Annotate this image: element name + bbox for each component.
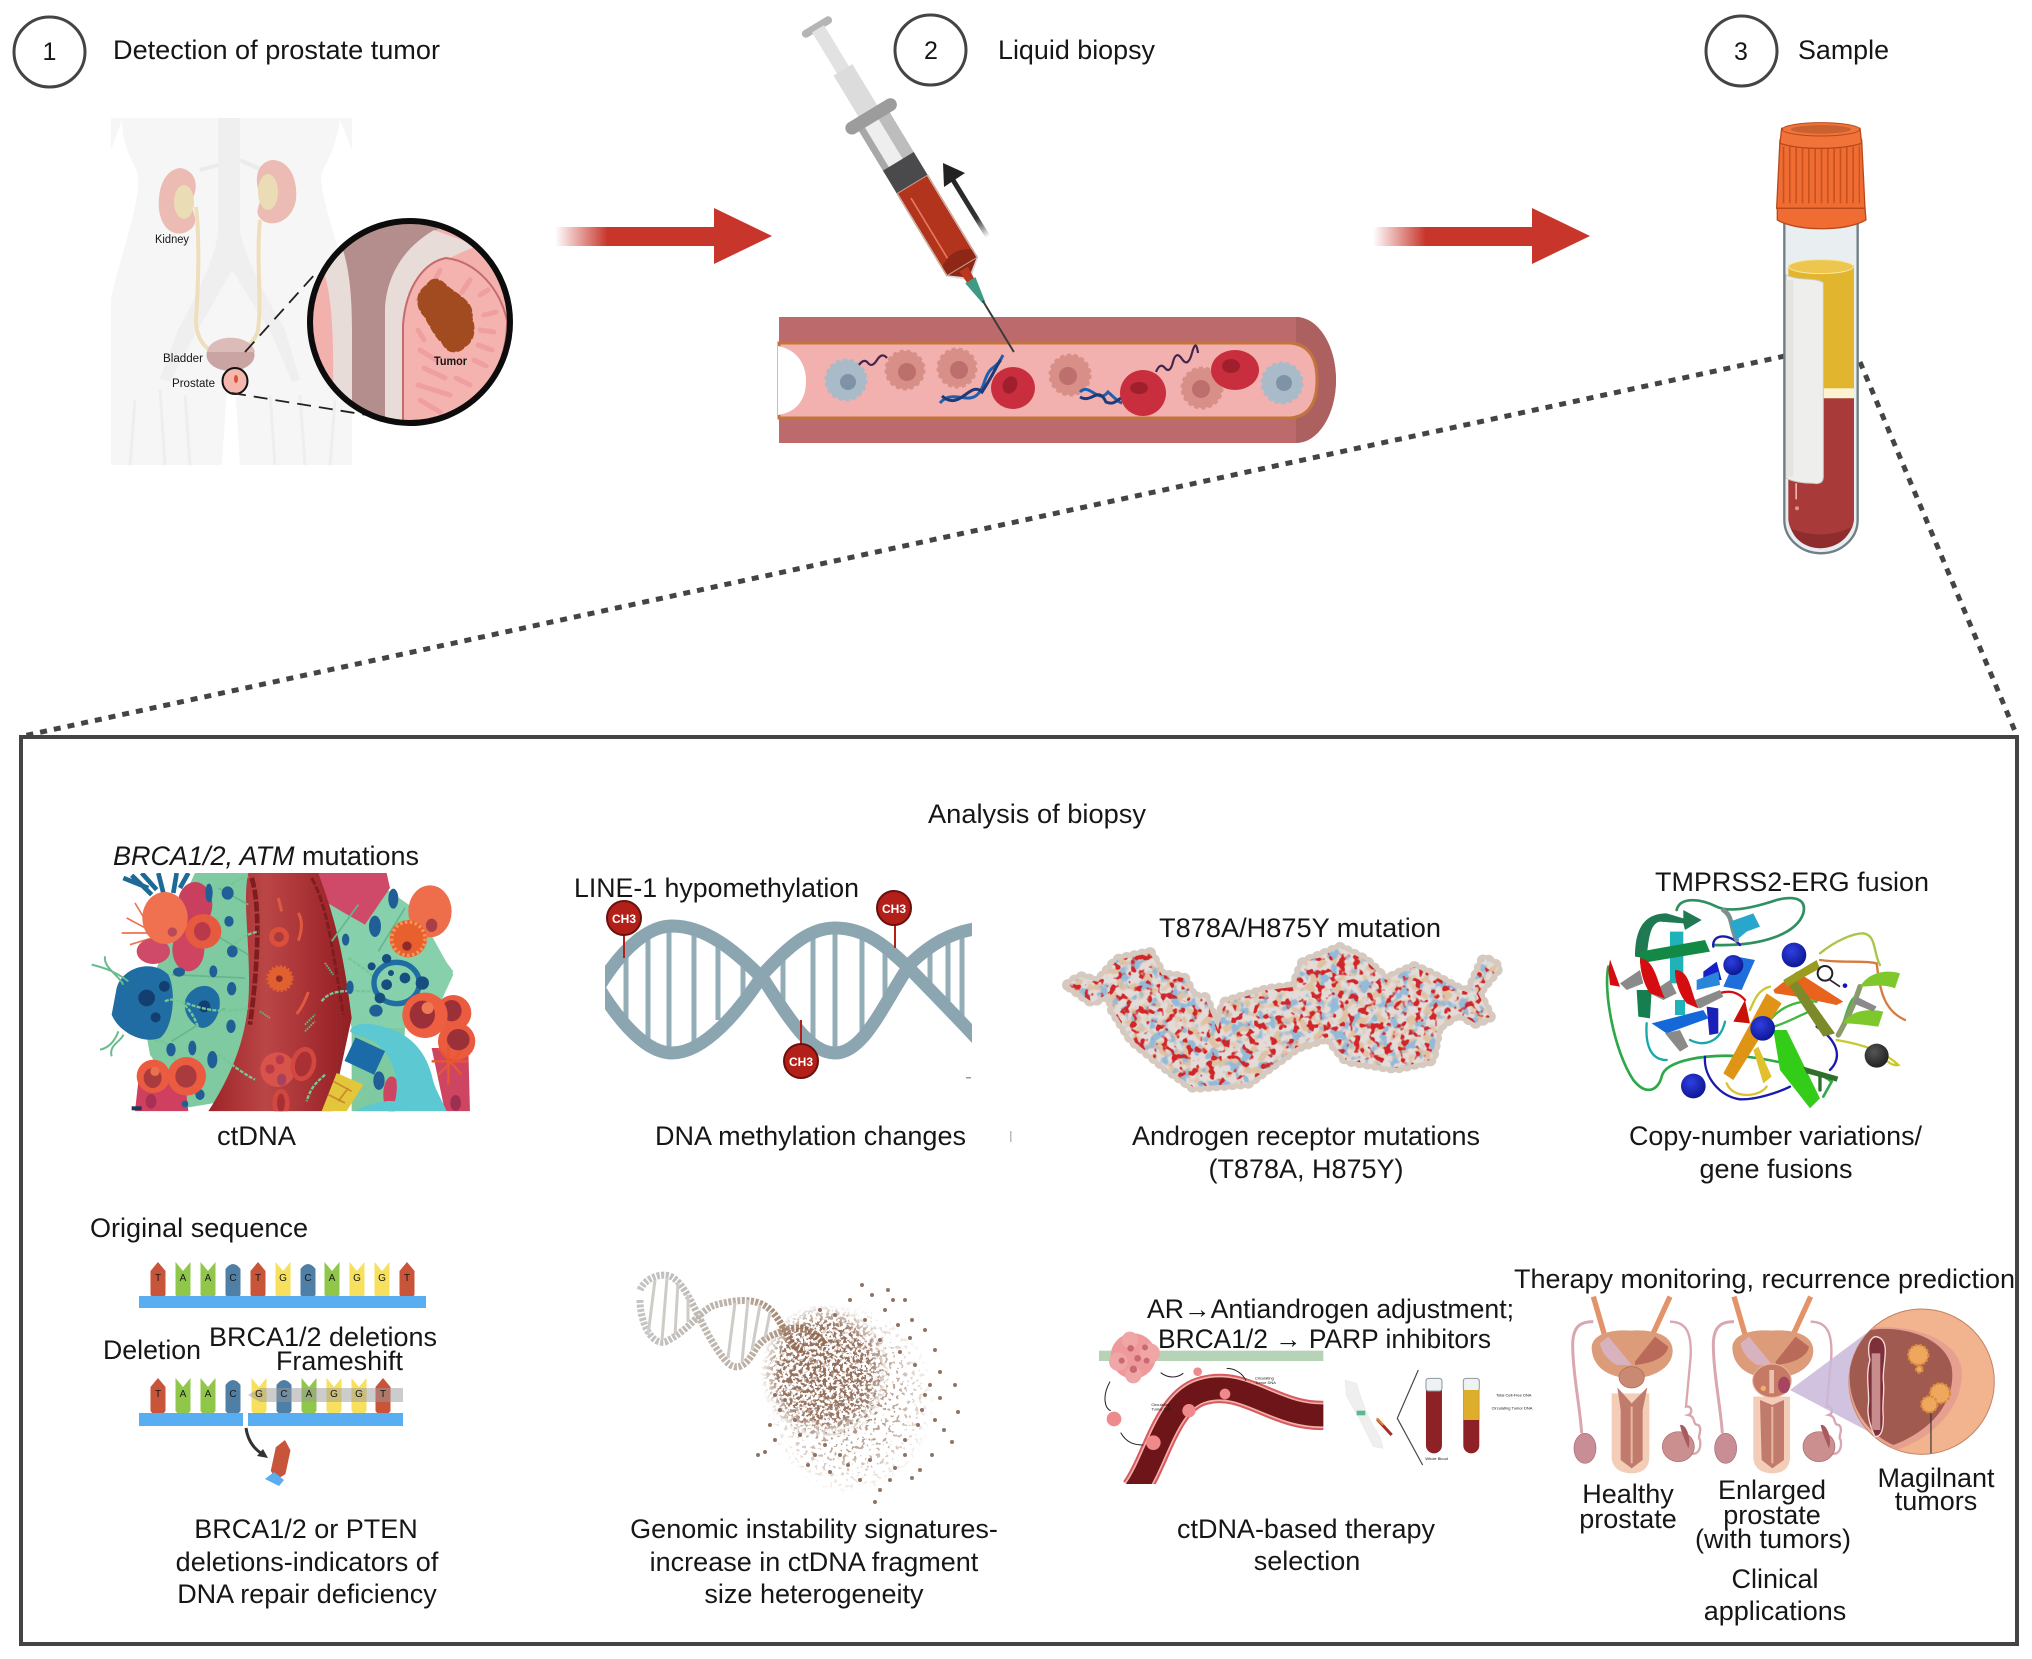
enlarged prostate label: Enlarged xyxy=(1718,1475,1826,1505)
copy number caption: gene fusions xyxy=(1699,1154,1853,1184)
separated plasma tube: Total Cell-Free DNA xyxy=(1496,1393,1532,1398)
curved tumour vessel xyxy=(1135,1388,1330,1490)
urinary anatomy illustration xyxy=(111,118,352,465)
ctDNA caption: ctDNA xyxy=(217,1121,296,1151)
step 2 heading: Liquid biopsy xyxy=(998,35,1155,65)
deleted nucleotide sequence: A xyxy=(180,1389,187,1400)
circulating white cell right xyxy=(1262,363,1302,403)
anatomy label: bladder: Bladder xyxy=(163,353,203,365)
tumor cell cluster xyxy=(1109,1332,1160,1383)
whole blood tube xyxy=(1425,1378,1448,1461)
original nucleotide sequence: T xyxy=(255,1273,261,1284)
original nucleotide sequence: T xyxy=(404,1273,410,1284)
DNA methylation caption: DNA methylation changes xyxy=(655,1121,966,1151)
deleted nucleotide sequence: A xyxy=(306,1389,313,1400)
healthy prostate label xyxy=(1579,1479,1677,1534)
separated plasma tube xyxy=(1463,1378,1533,1453)
magnification wedge xyxy=(1790,1332,1875,1435)
syringe drawing blood xyxy=(790,9,1039,367)
red arrow 1 to 2 xyxy=(555,208,772,264)
therapy selection illustration: Circulating xyxy=(1255,1375,1274,1380)
original nucleotide sequence: A xyxy=(329,1273,336,1284)
clinical applications caption: Clinical xyxy=(1731,1564,1819,1594)
patient arm blood draw xyxy=(1345,1380,1392,1448)
original nucleotide sequence: C xyxy=(304,1273,312,1284)
BRCA/PTEN caption xyxy=(176,1514,439,1609)
original nucleotide sequence: C xyxy=(229,1273,237,1284)
clinical applications caption xyxy=(1704,1564,1846,1626)
genomic instability caption xyxy=(630,1514,998,1609)
glove and tube xyxy=(350,1024,447,1111)
deletion label: Deletion xyxy=(103,1335,201,1365)
BRCA1/2 ATM mutation label: BRCA1/2, ATM mutations xyxy=(113,841,419,871)
copy number caption xyxy=(1629,1121,1922,1184)
BRCA/PTEN caption: deletions-indicators of xyxy=(176,1547,439,1577)
red arrow 2 to 3 xyxy=(1373,208,1590,264)
tumor mass xyxy=(420,281,472,350)
blood vessel with circulating cells xyxy=(778,317,1336,443)
protein ribbon structure xyxy=(1607,898,1905,1108)
genomic instability caption: size heterogeneity xyxy=(704,1579,924,1609)
methyl pin 1: CH3 xyxy=(612,912,636,926)
TMPRSS2-ERG label: TMPRSS2-ERG fusion xyxy=(1655,867,1929,897)
deleted nucleotide sequence: A xyxy=(205,1389,212,1400)
deleted nucleotide sequence: C xyxy=(280,1389,288,1400)
magnified malignant prostate xyxy=(1848,1309,1994,1454)
enlarged prostate label xyxy=(1695,1475,1851,1554)
original nucleotide sequence: G xyxy=(378,1273,386,1284)
therapy selection illustration: Tumor DNA xyxy=(1255,1380,1276,1385)
blood collection tube xyxy=(1777,123,1866,553)
LINE-1 hypomethylation label: LINE-1 hypomethylation xyxy=(574,873,859,903)
circulating white cell left xyxy=(826,360,866,400)
upward black arrow xyxy=(943,163,988,237)
frameshift label: Frameshift xyxy=(276,1346,403,1376)
deleted nucleotide sequence: T xyxy=(380,1389,386,1400)
therapy selection illustration: Circulating xyxy=(1151,1402,1170,1407)
analysis panel frame xyxy=(21,737,2017,1644)
DNA fragmenting into particles xyxy=(640,1275,958,1502)
therapy selection illustration: Tumor Cell xyxy=(1151,1407,1171,1412)
enlarged prostate with tumors xyxy=(1713,1297,1841,1473)
methyl pin 1 xyxy=(607,901,641,958)
enlarged prostate label: prostate xyxy=(1723,1500,1821,1530)
dotted connectors from tube to analysis panel xyxy=(23,356,2017,736)
methyl pin 2 xyxy=(877,891,911,948)
androgen receptor caption: (T878A, H875Y) xyxy=(1208,1154,1404,1184)
step 1 number badge xyxy=(14,17,85,87)
metal ions xyxy=(1681,943,1889,1098)
T878A/H875Y label: T878A/H875Y mutation xyxy=(1159,913,1441,943)
copy number caption: Copy-number variations/ xyxy=(1629,1121,1922,1151)
genomic instability caption: increase in ctDNA fragment xyxy=(650,1547,979,1577)
excised nucleotide with curved arrow xyxy=(246,1428,292,1486)
ctDNA tissue illustration xyxy=(92,873,475,1117)
prostate anatomy comparison xyxy=(1573,1297,1994,1473)
red blood cells in vessel xyxy=(260,1052,295,1087)
genomic instability caption: Genomic instability signatures- xyxy=(630,1514,998,1544)
malignant tumors label: tumors xyxy=(1895,1486,1977,1516)
step 2 number badge xyxy=(895,15,966,85)
original nucleotide sequence: G xyxy=(279,1273,287,1284)
original nucleotide sequence: A xyxy=(205,1273,212,1284)
step 3 number badge: 3 xyxy=(1734,38,1748,66)
step 3 number badge xyxy=(1706,16,1777,86)
therapy adjustment label line 1: AR→Antiandrogen adjustment; xyxy=(1147,1294,1514,1324)
BRCA1/2 deletions label: BRCA1/2 deletions xyxy=(209,1322,437,1352)
magnified prostate with tumor xyxy=(305,215,520,430)
original sequence label: Original sequence xyxy=(90,1213,308,1243)
healthy prostate label: prostate xyxy=(1579,1504,1677,1534)
deleted nucleotide sequence: G xyxy=(355,1389,363,1400)
deleted nucleotide sequence: G xyxy=(255,1389,263,1400)
androgen receptor caption: Androgen receptor mutations xyxy=(1132,1121,1480,1151)
therapy selection caption: selection xyxy=(1254,1546,1360,1576)
DNA double helix with methyl groups xyxy=(600,891,980,1078)
enlarged prostate label: (with tumors) xyxy=(1695,1524,1851,1554)
panel title: Analysis of biopsy xyxy=(928,799,1147,829)
deleted nucleotide sequence: G xyxy=(330,1389,338,1400)
step 1 heading: Detection of prostate tumor xyxy=(113,35,440,65)
tumor nodules xyxy=(1908,1345,1950,1412)
methyl pin 3: CH3 xyxy=(789,1055,813,1069)
therapy selection caption xyxy=(1177,1514,1436,1576)
healthy prostate xyxy=(1573,1297,1700,1473)
therapy monitoring label: Therapy monitoring, recurrence prediction xyxy=(1514,1264,2015,1294)
tumor label: Tumor xyxy=(434,354,467,368)
BRCA/PTEN caption: DNA repair deficiency xyxy=(177,1579,437,1609)
step 1 number badge: 1 xyxy=(43,38,56,66)
circulating tumor cells xyxy=(886,349,1222,408)
healthy prostate label: Healthy xyxy=(1582,1479,1674,1509)
methyl pin 2: CH3 xyxy=(882,902,906,916)
androgen receptor molecular surface xyxy=(1060,940,1505,1095)
androgen receptor caption xyxy=(1132,1121,1480,1184)
circulating DNA fragments xyxy=(859,346,1198,403)
therapy adjustment label line 2: BRCA1/2 → PARP inhibitors xyxy=(1158,1324,1491,1354)
malignant tumors label: Magilnant xyxy=(1877,1463,1995,1493)
methyl pin 3 xyxy=(784,1020,818,1078)
step 3 heading: Sample xyxy=(1798,35,1889,65)
deleted nucleotide sequence: C xyxy=(229,1389,237,1400)
deleted nucleotide sequence: T xyxy=(155,1389,161,1400)
clinical applications caption: applications xyxy=(1704,1596,1846,1626)
original nucleotide sequence xyxy=(139,1262,426,1308)
original nucleotide sequence: G xyxy=(353,1273,361,1284)
red blood cells xyxy=(991,350,1259,416)
anatomy label: kidney: Kidney xyxy=(155,234,189,246)
anatomy label: prostate: Prostate xyxy=(172,378,215,390)
malignant tumors label xyxy=(1877,1463,1995,1516)
therapy selection illustration xyxy=(1099,1332,1533,1490)
zoom guide dashed lines xyxy=(232,273,367,415)
deleted nucleotide sequence xyxy=(139,1378,403,1426)
BRCA/PTEN caption: BRCA1/2 or PTEN xyxy=(194,1514,418,1544)
step 2 number badge: 2 xyxy=(924,37,938,65)
original nucleotide sequence: T xyxy=(155,1273,161,1284)
original nucleotide sequence: A xyxy=(180,1273,187,1284)
therapy selection caption: ctDNA-based therapy xyxy=(1177,1514,1436,1544)
whole blood tube: Whole Blood xyxy=(1425,1456,1448,1461)
separated plasma tube: Circulating Tumor DNA xyxy=(1492,1405,1533,1410)
